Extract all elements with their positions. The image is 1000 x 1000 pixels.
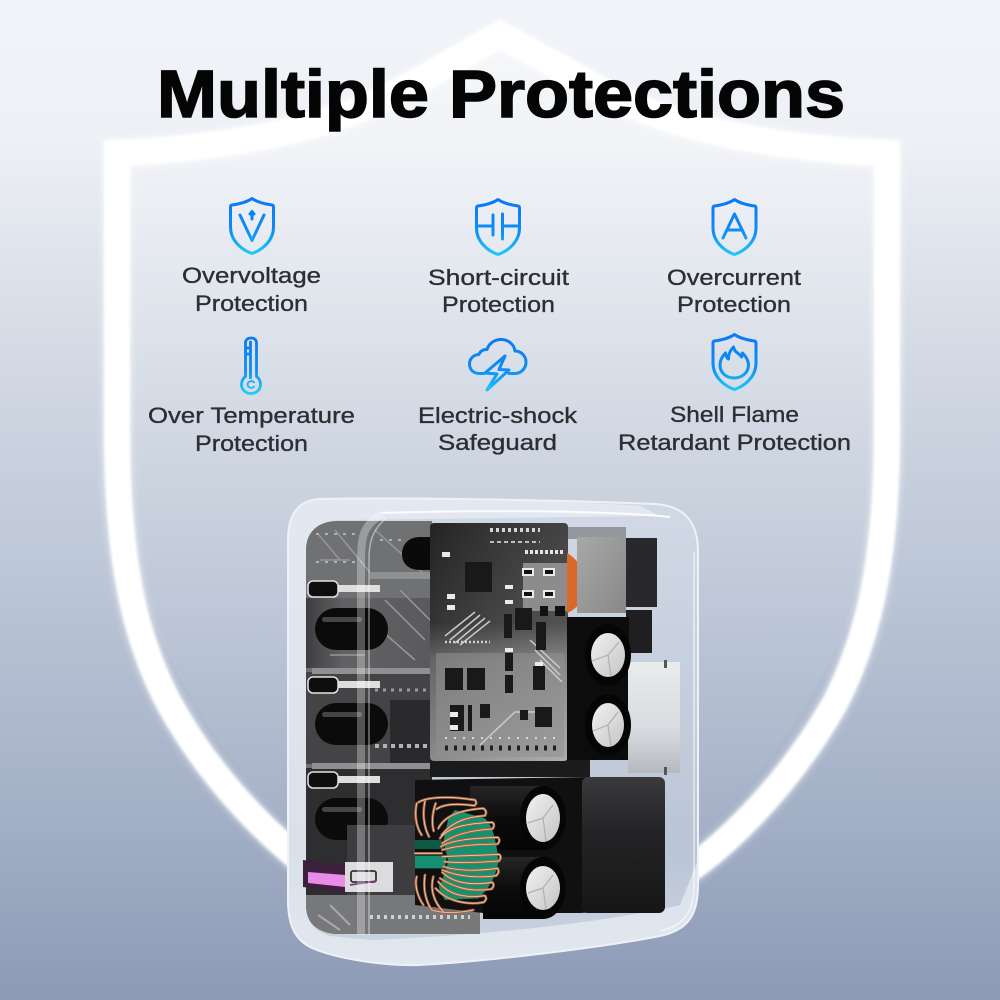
label: short-circuit: Protection — [442, 292, 555, 317]
silver connector plate — [628, 660, 680, 775]
label: short-circuit — [428, 265, 570, 317]
label: short-circuit: Short-circuit — [428, 265, 570, 290]
label: overcurrent: Protection — [677, 292, 791, 317]
silver block — [577, 537, 626, 613]
shield outline — [117, 35, 887, 930]
icon: short-circuit shield — [476, 200, 520, 254]
case left rim — [288, 498, 698, 965]
toroid inductor — [415, 797, 501, 912]
lower dark block — [415, 777, 640, 913]
grey strips — [312, 572, 433, 769]
orange component — [567, 553, 585, 613]
label: overvoltage: Overvoltage — [182, 263, 321, 288]
label: shell flame — [618, 402, 851, 455]
label: over temperature: Over Temperature — [148, 403, 355, 428]
small components — [442, 552, 555, 730]
icon: overcurrent shield — [713, 200, 756, 254]
capacitor lower 2 — [483, 857, 566, 919]
transparent case — [288, 498, 698, 965]
label: overvoltage — [182, 263, 321, 316]
circuit traces: left section — [306, 530, 432, 898]
glass edge highlight — [361, 511, 694, 935]
usb-c ports — [308, 581, 380, 788]
internal chassis — [306, 521, 432, 934]
label: shell flame: Retardant Protection — [618, 430, 851, 455]
lower chassis — [430, 760, 590, 777]
label: over temperature — [148, 403, 355, 456]
dark blocks — [626, 538, 657, 653]
label: electric-shock: Safeguard — [438, 430, 557, 455]
label: overcurrent — [667, 265, 802, 317]
icon: flame shield — [713, 334, 756, 390]
icon: cloud with lightning — [470, 340, 526, 390]
capacitor lower 1 — [470, 786, 566, 850]
dark capsules — [315, 608, 388, 840]
black cube — [582, 777, 665, 913]
label: electric-shock: Electric-shock — [418, 403, 578, 428]
title: Multiple Protections — [157, 57, 845, 132]
traces — [445, 612, 562, 745]
capacitor middle — [585, 694, 631, 756]
usb-a port — [303, 860, 393, 893]
icon: thermometer — [242, 338, 260, 394]
top translucent block — [568, 527, 626, 539]
label: overvoltage: Protection — [195, 291, 308, 316]
label: electric-shock — [418, 403, 578, 455]
label: overcurrent: Overcurrent — [667, 265, 802, 290]
label: shell flame: Shell Flame — [670, 402, 799, 427]
capacitor top — [585, 624, 631, 686]
lower dark panel — [347, 825, 415, 907]
icon: overvoltage shield — [230, 198, 274, 254]
capacitor back panel — [567, 617, 629, 760]
main circuit board — [430, 523, 568, 761]
black round component — [402, 537, 430, 570]
label: over temperature: Protection — [195, 431, 308, 456]
bottom-left circuit strip — [306, 895, 480, 934]
chips — [445, 562, 552, 731]
charger — [288, 498, 698, 965]
